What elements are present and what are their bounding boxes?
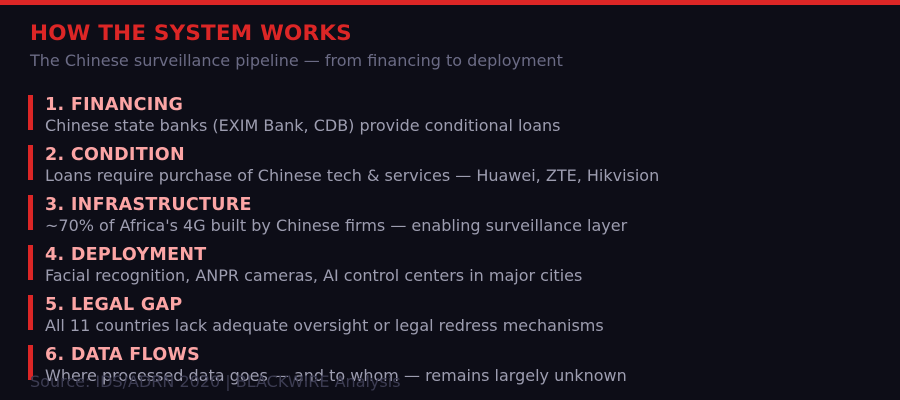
step 4 <box>28 245 582 285</box>
step 2: 2. CONDITION <box>45 145 185 165</box>
step 3 <box>28 195 628 235</box>
step 5: All 11 countries lack adequate oversight or legal redress mechanisms <box>45 316 604 335</box>
step 4: 4. DEPLOYMENT <box>45 245 207 265</box>
step 6: 6. DATA FLOWS <box>45 345 200 365</box>
step 3: 3. INFRASTRUCTURE <box>45 195 252 215</box>
subtitle: The Chinese surveillance pipeline — from financing to deployment <box>30 51 563 70</box>
step 5 <box>28 295 604 335</box>
step 6 <box>28 345 627 385</box>
step 4: Facial recognition, ANPR cameras, AI control centers in major cities <box>45 266 582 285</box>
step 2: Loans require purchase of Chinese tech & services — Huawei, ZTE, Hikvision <box>45 166 659 185</box>
step 2 <box>28 145 659 185</box>
step 5: 5. LEGAL GAP <box>45 295 183 315</box>
step 1: 1. FINANCING <box>45 95 183 115</box>
source note: Source: IDS/ADRN 2020 | BLACKWIRE Analysis <box>30 372 401 391</box>
title: HOW THE SYSTEM WORKS <box>30 21 352 46</box>
step 1 <box>28 95 560 135</box>
step 6: Where processed data goes — and to whom — remains largely unknown <box>45 366 627 385</box>
step 1: Chinese state banks (EXIM Bank, CDB) provide conditional loans <box>45 116 560 135</box>
step 3: ~70% of Africa's 4G built by Chinese firms — enabling surveillance layer <box>45 216 627 235</box>
top bar <box>0 0 900 5</box>
